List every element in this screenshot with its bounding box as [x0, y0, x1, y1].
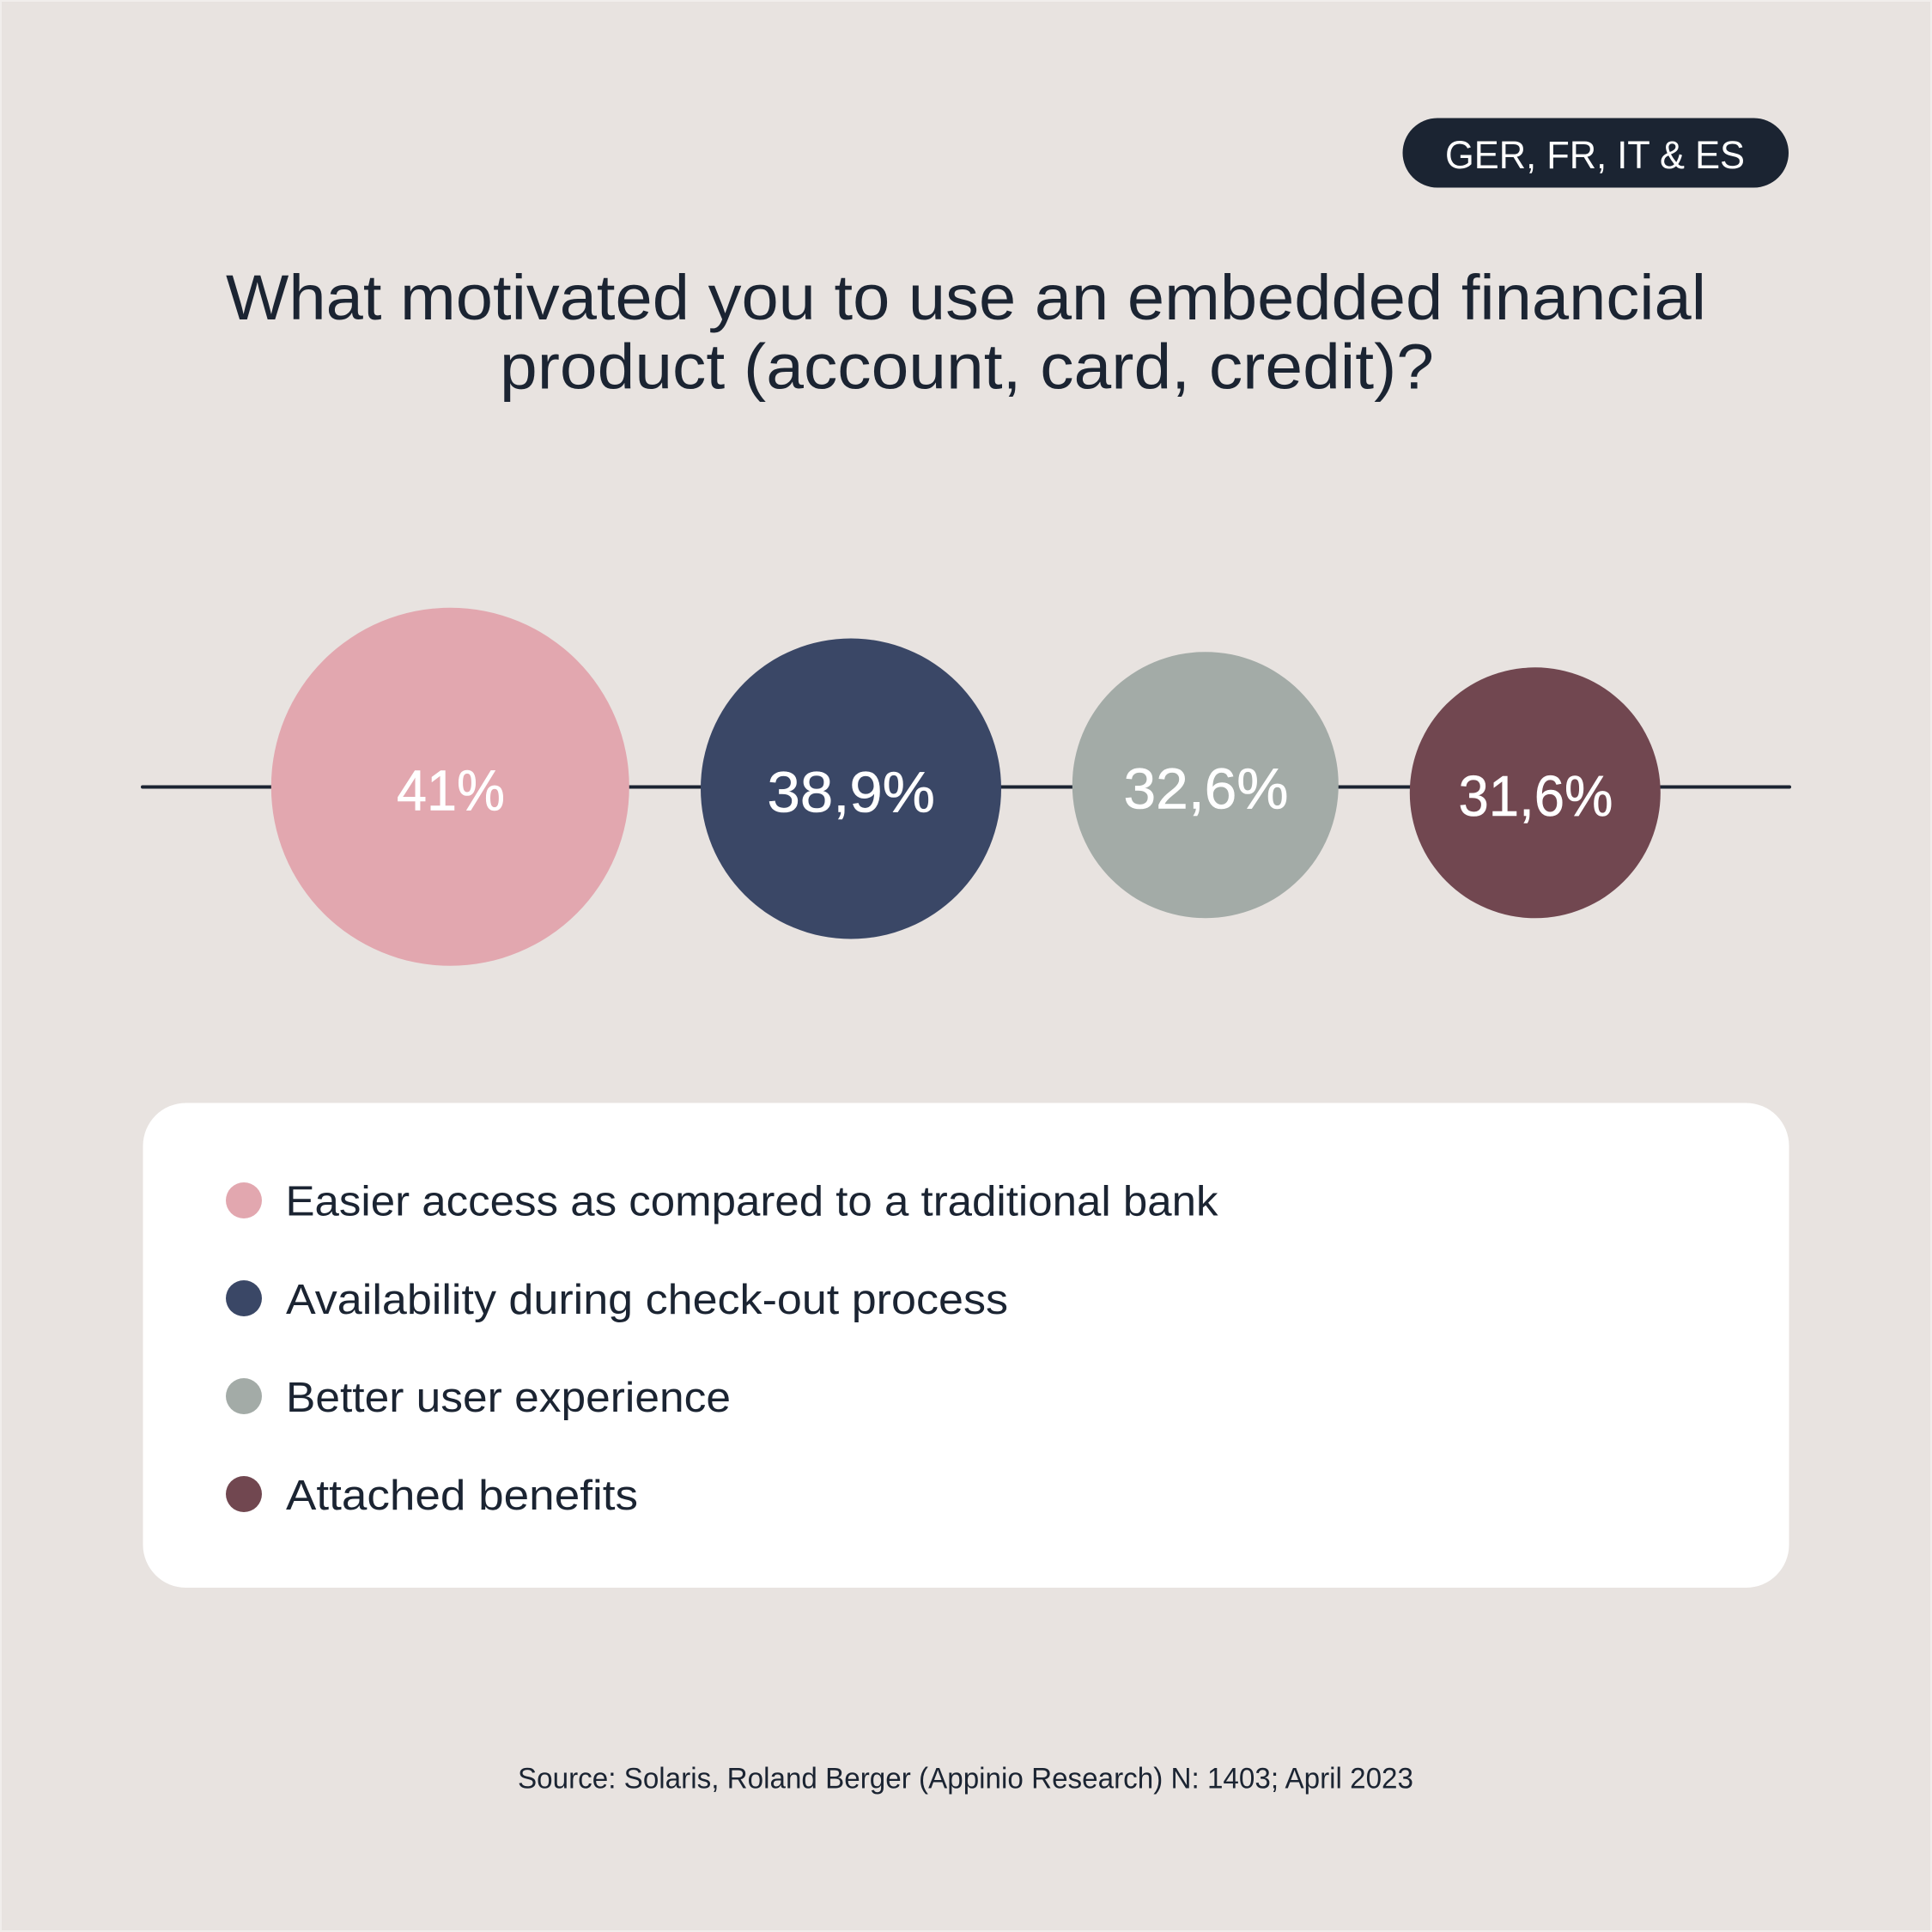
bubble: 32,6%: 32,6% — [1123, 757, 1288, 821]
title: What motivated you to use an embedded financial — [226, 262, 1706, 333]
bubble: 41%: 41% — [397, 759, 505, 823]
legend item: attached benefits: Attached benefits — [286, 1472, 638, 1519]
bubble chart — [143, 608, 1789, 966]
baseline axis — [143, 785, 1789, 788]
bubble: 41% — [271, 608, 629, 966]
bubble: 31,6% — [1410, 667, 1661, 918]
source note: Source: Solaris, Roland Berger (Appinio Research) N: 1403; April 2023 — [518, 1762, 1413, 1795]
bubble: 38,9% — [701, 639, 1001, 939]
legend item: availability: Availability during check-out process — [286, 1276, 1008, 1323]
region tag pill — [1403, 118, 1789, 187]
legend item: easier access: Easier access as compared to a traditional bank — [285, 1178, 1218, 1224]
bubble: 38,9%: 38,9% — [768, 761, 935, 824]
legend item: user experience: Better user experience — [286, 1374, 731, 1421]
title: product (account, card, credit)? — [500, 331, 1434, 402]
title — [226, 262, 1706, 402]
bubble: 32,6% — [1072, 652, 1339, 918]
region tag pill: GER, FR, IT & ES — [1445, 133, 1745, 177]
bubble: 31,6%: 31,6% — [1458, 764, 1613, 829]
legend panel — [143, 1103, 1789, 1588]
